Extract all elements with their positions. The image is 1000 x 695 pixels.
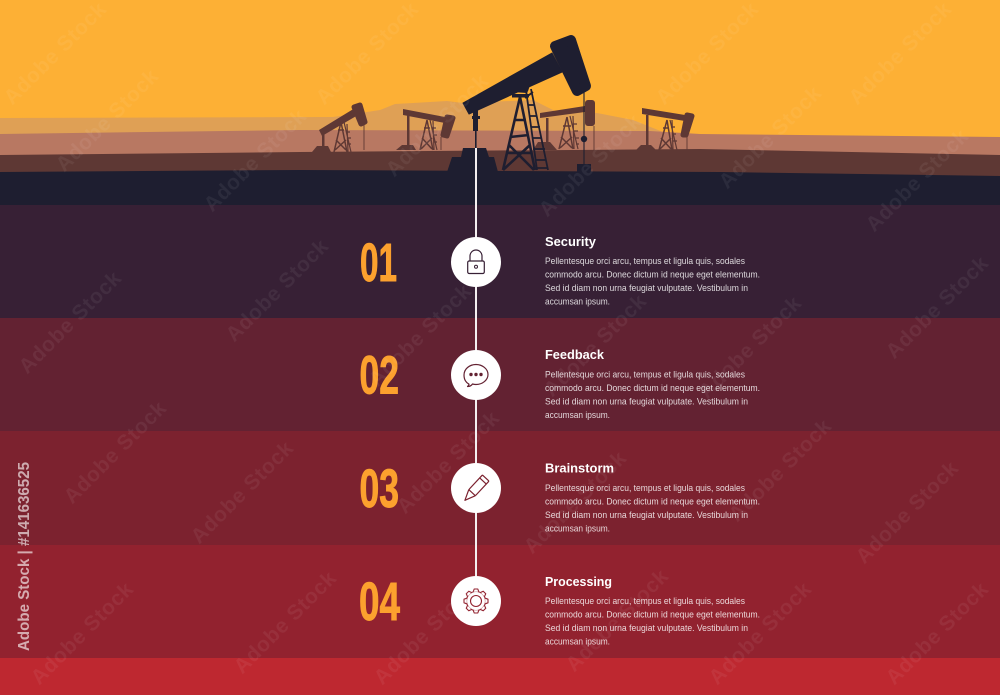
watermark pattern: Adobe Stock (393, 407, 504, 518)
watermark pattern: Adobe Stock (520, 447, 631, 558)
band 2 (0, 318, 1000, 431)
pale hill layer (0, 130, 1000, 160)
body text 4: Pellentesque orci arcu, tempus et ligula quis, sodales (545, 596, 745, 607)
watermark pattern: Adobe Stock (230, 567, 341, 678)
watermark pattern: Adobe Stock (187, 437, 298, 548)
body text 1 (545, 256, 760, 308)
step 3: brainstorm (360, 459, 760, 534)
main pump jack (447, 40, 591, 172)
band 3 (0, 431, 1000, 545)
body text 1: accumsan ipsum. (545, 296, 610, 308)
watermark pattern: Adobe Stock (15, 267, 126, 378)
dark ground layer (0, 170, 1000, 206)
body text 3: Pellentesque orci arcu, tempus et ligula quis, sodales (545, 483, 745, 494)
watermark pattern: Adobe Stock (652, 0, 763, 109)
body text 3 (545, 483, 760, 534)
body text 4: accumsan ipsum. (545, 636, 610, 648)
watermark pattern: Adobe Stock (695, 292, 806, 403)
watermark pattern: Adobe Stock (862, 125, 973, 236)
body text 3: Sed id diam non urna feugiat vulputate. Vestibulum in (545, 510, 748, 521)
body text 3: commodo arcu. Donec dictum id neque eget elementum. (545, 496, 760, 508)
icon: pencil (451, 463, 501, 513)
icon: padlock (451, 237, 501, 287)
watermark pattern: Adobe Stock (540, 290, 651, 401)
body text 4 (545, 596, 760, 648)
sky background (0, 0, 1000, 206)
watermark pattern: Adobe Stock (370, 578, 481, 689)
body text 2: Sed id diam non urna feugiat vulputate. Vestibulum in (545, 396, 748, 408)
number 02: 02 (360, 346, 399, 406)
body text 2: Pellentesque orci arcu, tempus et ligula quis, sodales (545, 370, 745, 380)
background pump 2 (396, 109, 453, 150)
watermark pattern: Adobe Stock (882, 252, 993, 363)
band 4 (0, 545, 1000, 658)
bottom red band (0, 658, 1000, 695)
body text 2: commodo arcu. Donec dictum id neque eget elementum. (545, 383, 760, 394)
number 03: 03 (360, 459, 399, 519)
band 1 (0, 205, 1000, 318)
body text 2 (545, 370, 760, 421)
heading: Security: Security (545, 234, 597, 249)
watermark pattern: Adobe Stock (705, 578, 816, 689)
watermark pattern: Adobe Stock (60, 397, 171, 508)
number 01: 01 (360, 233, 397, 293)
heading: Processing: Processing (545, 574, 612, 589)
watermark pattern: Adobe Stock (882, 578, 993, 689)
step 2: feedback (360, 346, 760, 421)
watermark pattern: Adobe Stock (535, 110, 646, 221)
step 4: processing (359, 572, 760, 648)
body text 1: Sed id diam non urna feugiat vulputate. Vestibulum in (545, 283, 748, 294)
watermark pattern: Adobe Stock (845, 0, 956, 109)
icon: gear (451, 576, 501, 626)
vertical timeline line (475, 148, 477, 601)
watermark pattern: Adobe Stock (852, 457, 963, 568)
body text 4: Sed id diam non urna feugiat vulputate. Vestibulum in (545, 623, 748, 634)
icon: speech bubble (451, 350, 501, 400)
watermark pattern: Adobe Stock (562, 565, 673, 676)
body text 1: commodo arcu. Donec dictum id neque eget elementum. (545, 270, 760, 280)
heading: Brainstorm: Brainstorm (545, 460, 614, 476)
heading: Feedback: Feedback (545, 347, 605, 362)
brown ground layer (0, 149, 1000, 180)
background pump 1 (312, 105, 365, 152)
watermark pattern: Adobe Stock (222, 235, 333, 346)
watermark pattern: Adobe Stock (27, 578, 138, 689)
watermark pattern: Adobe Stock (312, 0, 423, 109)
background pump 3 (533, 102, 594, 150)
body text 2: accumsan ipsum. (545, 410, 610, 421)
distant mountains (0, 100, 672, 140)
watermark pattern: Adobe Stock (725, 415, 836, 526)
watermark pattern: Adobe Stock (52, 65, 163, 176)
watermark pattern: Adobe Stock (382, 70, 493, 181)
body text 4: commodo arcu. Donec dictum id neque eget elementum. (545, 610, 760, 620)
step 1: security (360, 233, 760, 308)
watermark pattern: Adobe Stock (365, 280, 476, 391)
background pump 4 (636, 108, 692, 150)
body text 1: Pellentesque orci arcu, tempus et ligula quis, sodales (545, 256, 745, 267)
watermark pattern: Adobe Stock (200, 105, 311, 216)
body text 3: accumsan ipsum. (545, 524, 610, 534)
number 04: 04 (359, 572, 400, 632)
watermark pattern: Adobe Stock (0, 0, 111, 109)
watermark pattern: Adobe Stock (715, 82, 826, 193)
side stock ID text: Adobe Stock | #141636525 (16, 462, 33, 651)
